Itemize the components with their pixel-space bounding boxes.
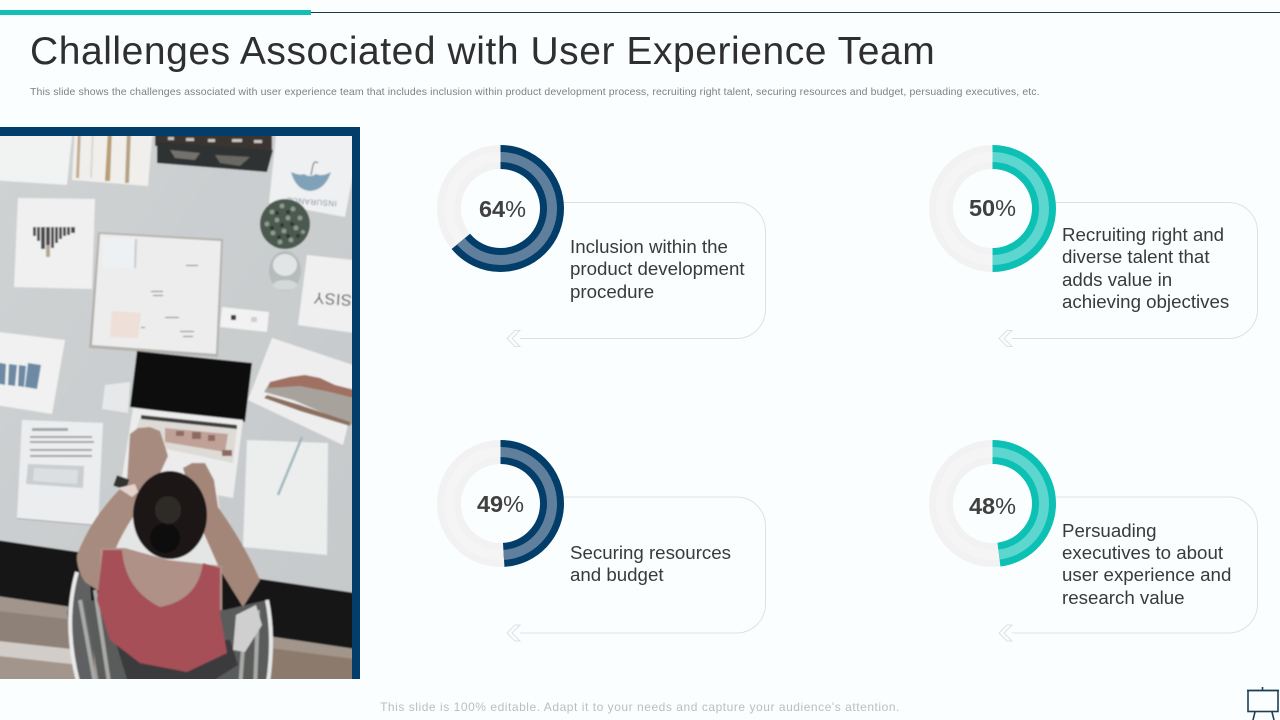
description: Securing resources bbox=[570, 542, 731, 562]
value 64%: 64% bbox=[479, 196, 526, 222]
value 48%: 48% bbox=[969, 492, 1016, 518]
card: securing resources 49% bbox=[437, 440, 766, 642]
description bbox=[570, 236, 745, 302]
footer note: This slide is 100% editable. Adapt it to your needs and capture your audience's attention. bbox=[380, 700, 900, 714]
top accent bar bbox=[0, 10, 1280, 15]
description: user experience and bbox=[1062, 564, 1231, 585]
card: persuading executives 48% bbox=[929, 440, 1258, 642]
card outline with arrow bbox=[998, 496, 1258, 642]
description: executives to about bbox=[1062, 542, 1223, 563]
card outline with arrow bbox=[506, 202, 766, 347]
card: recruiting 50% bbox=[929, 145, 1258, 347]
description bbox=[1062, 520, 1231, 608]
description: diverse talent that bbox=[1062, 246, 1210, 267]
description: research value bbox=[1062, 587, 1185, 608]
card: inclusion 64% bbox=[437, 145, 766, 347]
description: adds value in bbox=[1062, 269, 1172, 290]
description: and budget bbox=[570, 564, 664, 585]
description bbox=[1062, 224, 1229, 312]
donut chart 49% bbox=[437, 440, 564, 567]
donut chart 64% bbox=[437, 145, 564, 272]
description: Recruiting right and bbox=[1062, 224, 1224, 245]
value 49%: 49% bbox=[477, 490, 524, 516]
donut chart 48% bbox=[929, 440, 1056, 567]
description: Persuading bbox=[1062, 520, 1157, 540]
photo panel: woman working at laptop on desk with papers bbox=[0, 127, 360, 679]
description bbox=[570, 542, 731, 585]
icon: presentation easel bbox=[1247, 687, 1279, 720]
title: Challenges Associated with User Experience Team bbox=[30, 30, 935, 73]
card outline with arrow bbox=[998, 202, 1258, 347]
photo panel: woman working at laptop on desk with papers: INSURANCE bbox=[286, 195, 337, 208]
value 50%: 50% bbox=[969, 195, 1016, 221]
description: achieving objectives bbox=[1062, 291, 1229, 312]
donut chart 50% bbox=[929, 145, 1056, 272]
photo panel: woman working at laptop on desk with papers: SISY bbox=[313, 288, 352, 308]
card outline with arrow bbox=[506, 496, 766, 642]
description: product development bbox=[570, 258, 745, 279]
subtitle: This slide shows the challenges associated with user experience team that includes inclusion within product development process, recruiting right talent, securing resources and budget, persuading executives, etc. bbox=[30, 86, 1040, 98]
description: procedure bbox=[570, 281, 654, 302]
description: Inclusion within the bbox=[570, 236, 728, 257]
